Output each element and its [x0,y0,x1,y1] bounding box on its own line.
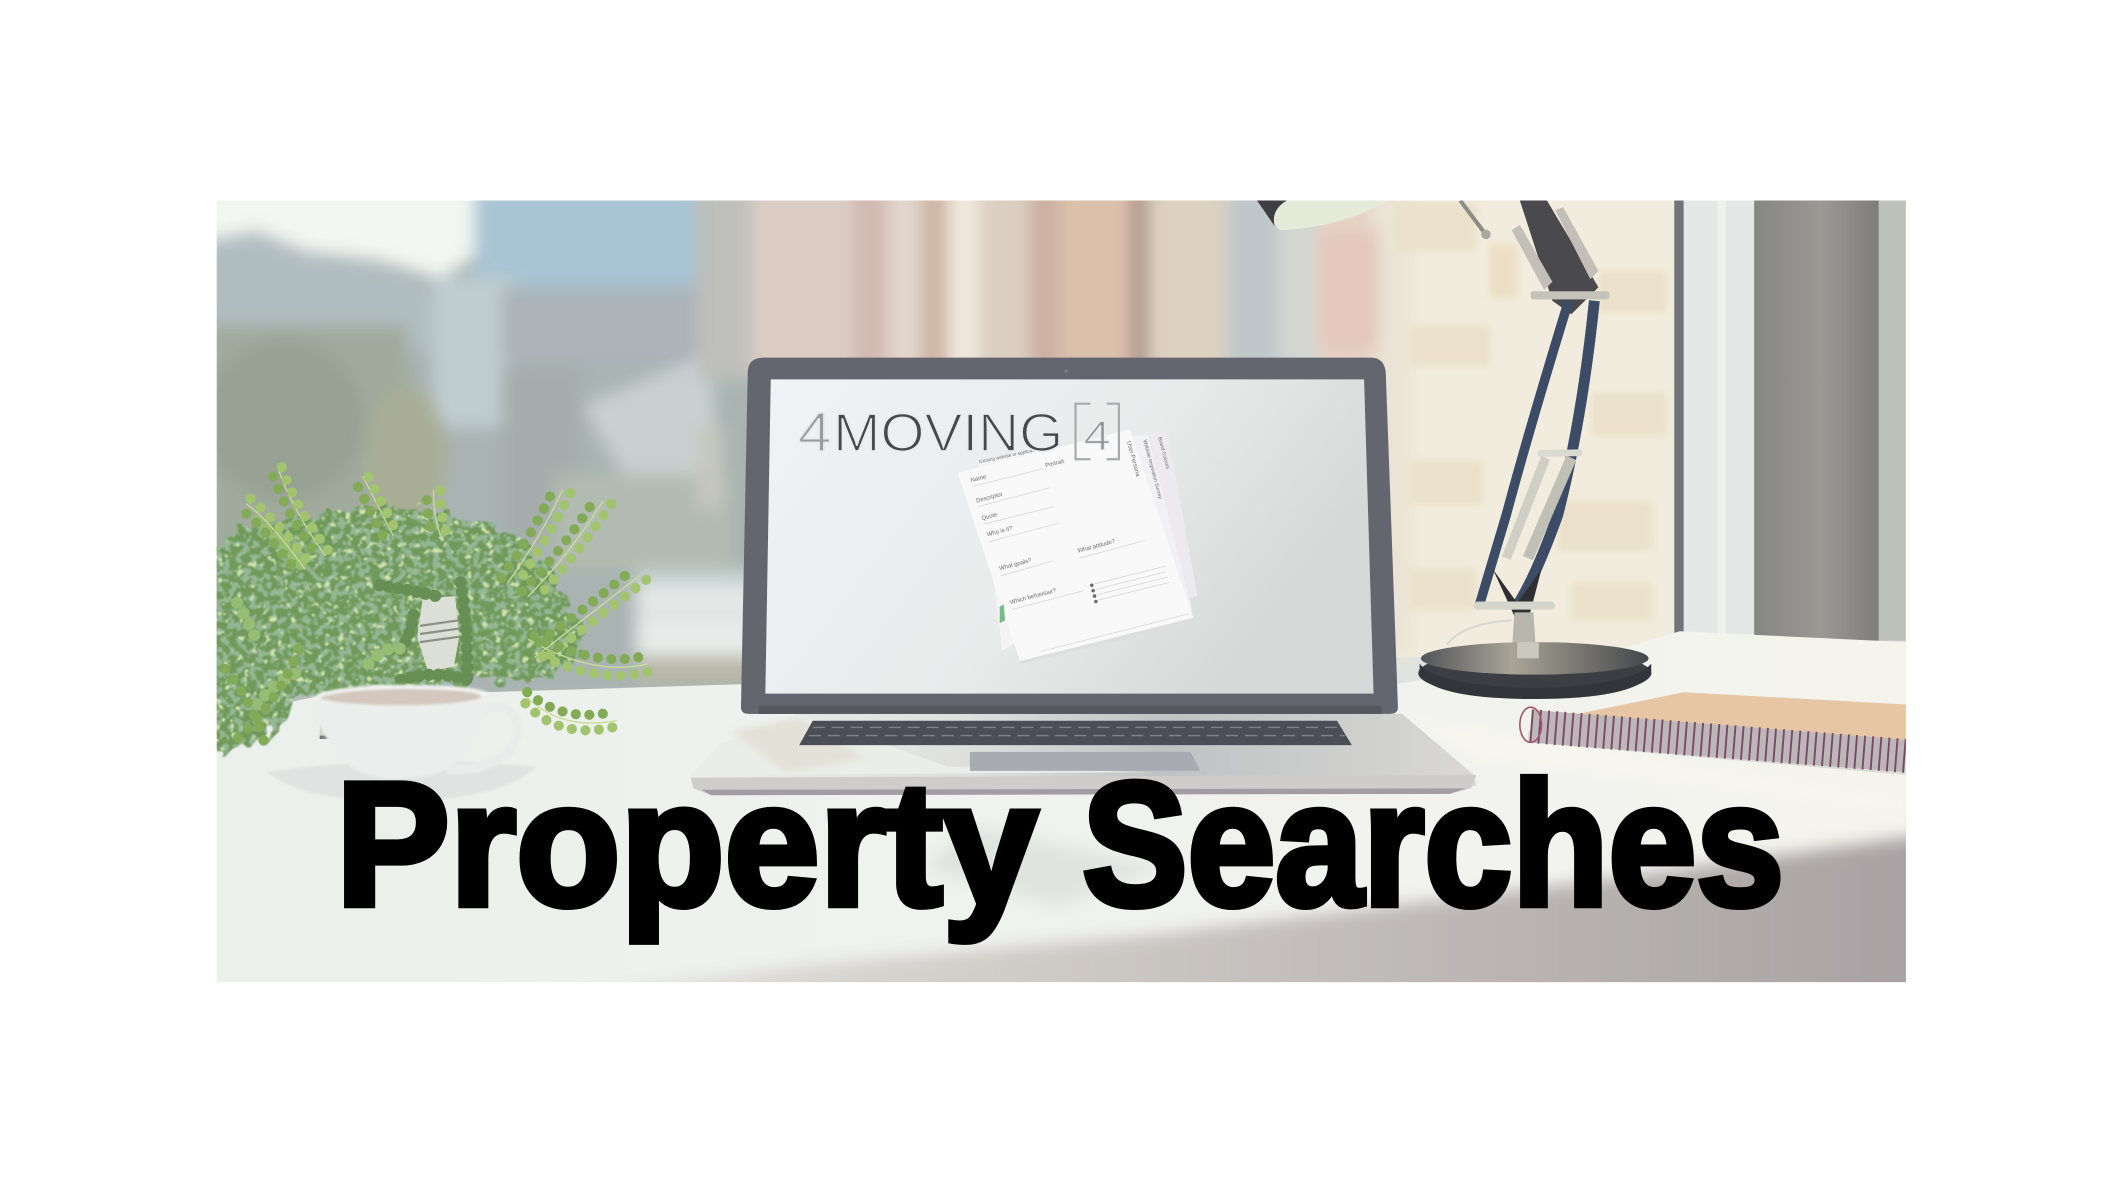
paper labels: Quote [981,512,999,522]
paper labels: Which behaviour? [1009,588,1058,606]
laptop keyboard [799,721,1352,745]
icon: coffee cup and saucer [267,687,536,802]
photo panel [216,200,1906,982]
laptop base [691,714,1477,795]
paper labels: What attitude? [1077,539,1117,555]
paper labels: Name [970,474,988,484]
logo: 4MOVING: MOVING [833,403,1063,463]
paper labels: User Persona [1125,441,1140,478]
icon: spiral notebook [1520,692,1906,775]
logo bracket mark [1076,404,1119,459]
lamp arms [1479,301,1594,606]
laptop [691,358,1477,795]
lamp head [1512,200,1609,314]
lamp base [1418,601,1651,699]
laptop trackpad [970,752,1200,771]
paper labels: Brand Colours [1156,437,1171,470]
plant pot base [320,684,382,739]
laptop screen [765,379,1374,694]
brick wall [1321,190,1677,657]
icon: desk lamp [1257,200,1651,699]
paper labels [970,437,1171,606]
foliage mass [203,505,582,753]
infographic canvas [216,200,1906,982]
lamp shade [1257,200,1388,230]
title: Searches [1082,747,1784,943]
blurred buildings: vertical stripes [695,200,1374,384]
logo: 4MOVING: 4 [798,401,832,463]
overlapping foliage [237,522,467,704]
window frame and grey wall [1674,200,1906,641]
paper labels: Descriptor [976,492,1003,505]
paper labels: Who is it? [986,526,1014,538]
title: Property [336,747,1038,943]
paper labels: What goals? [999,558,1033,572]
paper labels: Portrait [1045,459,1065,469]
trailing sprays [221,467,647,742]
paper labels: Existing website or application [979,447,1040,464]
title [336,747,1784,943]
lamp pistons [1493,449,1582,616]
logo: 4MOVING [798,401,1119,463]
lamp rod [1460,200,1491,239]
plant pot ridges [417,596,459,672]
icon: potted plant [203,467,647,753]
paper labels: Website Inspiration Survey [1141,439,1163,500]
laptop lid [741,358,1398,714]
stacked papers [958,429,1197,664]
window view: blurred city [203,190,772,704]
logo bracket mark: 4 [1084,412,1111,459]
desk surface [217,631,1906,982]
